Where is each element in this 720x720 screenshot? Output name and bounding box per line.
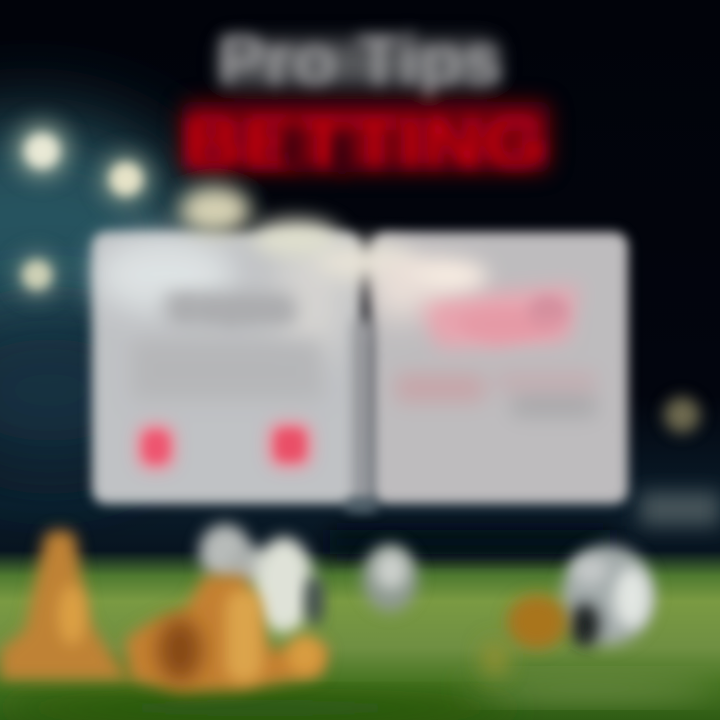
- panel: right page: [372, 232, 628, 504]
- panel: left page: [92, 232, 360, 504]
- soccer ball: centre: [362, 544, 418, 612]
- book spine: [346, 320, 376, 512]
- title: [182, 21, 550, 181]
- left heading: [165, 290, 295, 328]
- glare across pages: [179, 186, 488, 320]
- light: right: [664, 397, 700, 433]
- left heading: Tips: [165, 290, 295, 328]
- title line one: Pro Tips: [218, 21, 502, 99]
- right red heading: Tips: [421, 296, 571, 345]
- title line two: BETTING: [182, 103, 548, 181]
- soccer ball: centre-left: [199, 524, 324, 633]
- left text block: [132, 340, 322, 400]
- light: second: [98, 151, 154, 207]
- icon: red marker left: [135, 422, 177, 472]
- soccer ball: right: [562, 545, 654, 647]
- trophy shape: left golden figures: [0, 530, 328, 692]
- right red heading: [415, 286, 580, 348]
- light: top left: [12, 120, 72, 180]
- right text block: [396, 372, 596, 416]
- trophy shape: right golden figure: [481, 595, 567, 676]
- light: lower left: [13, 251, 61, 299]
- stadium lights: [12, 120, 700, 433]
- icon: red marker right: [266, 420, 314, 470]
